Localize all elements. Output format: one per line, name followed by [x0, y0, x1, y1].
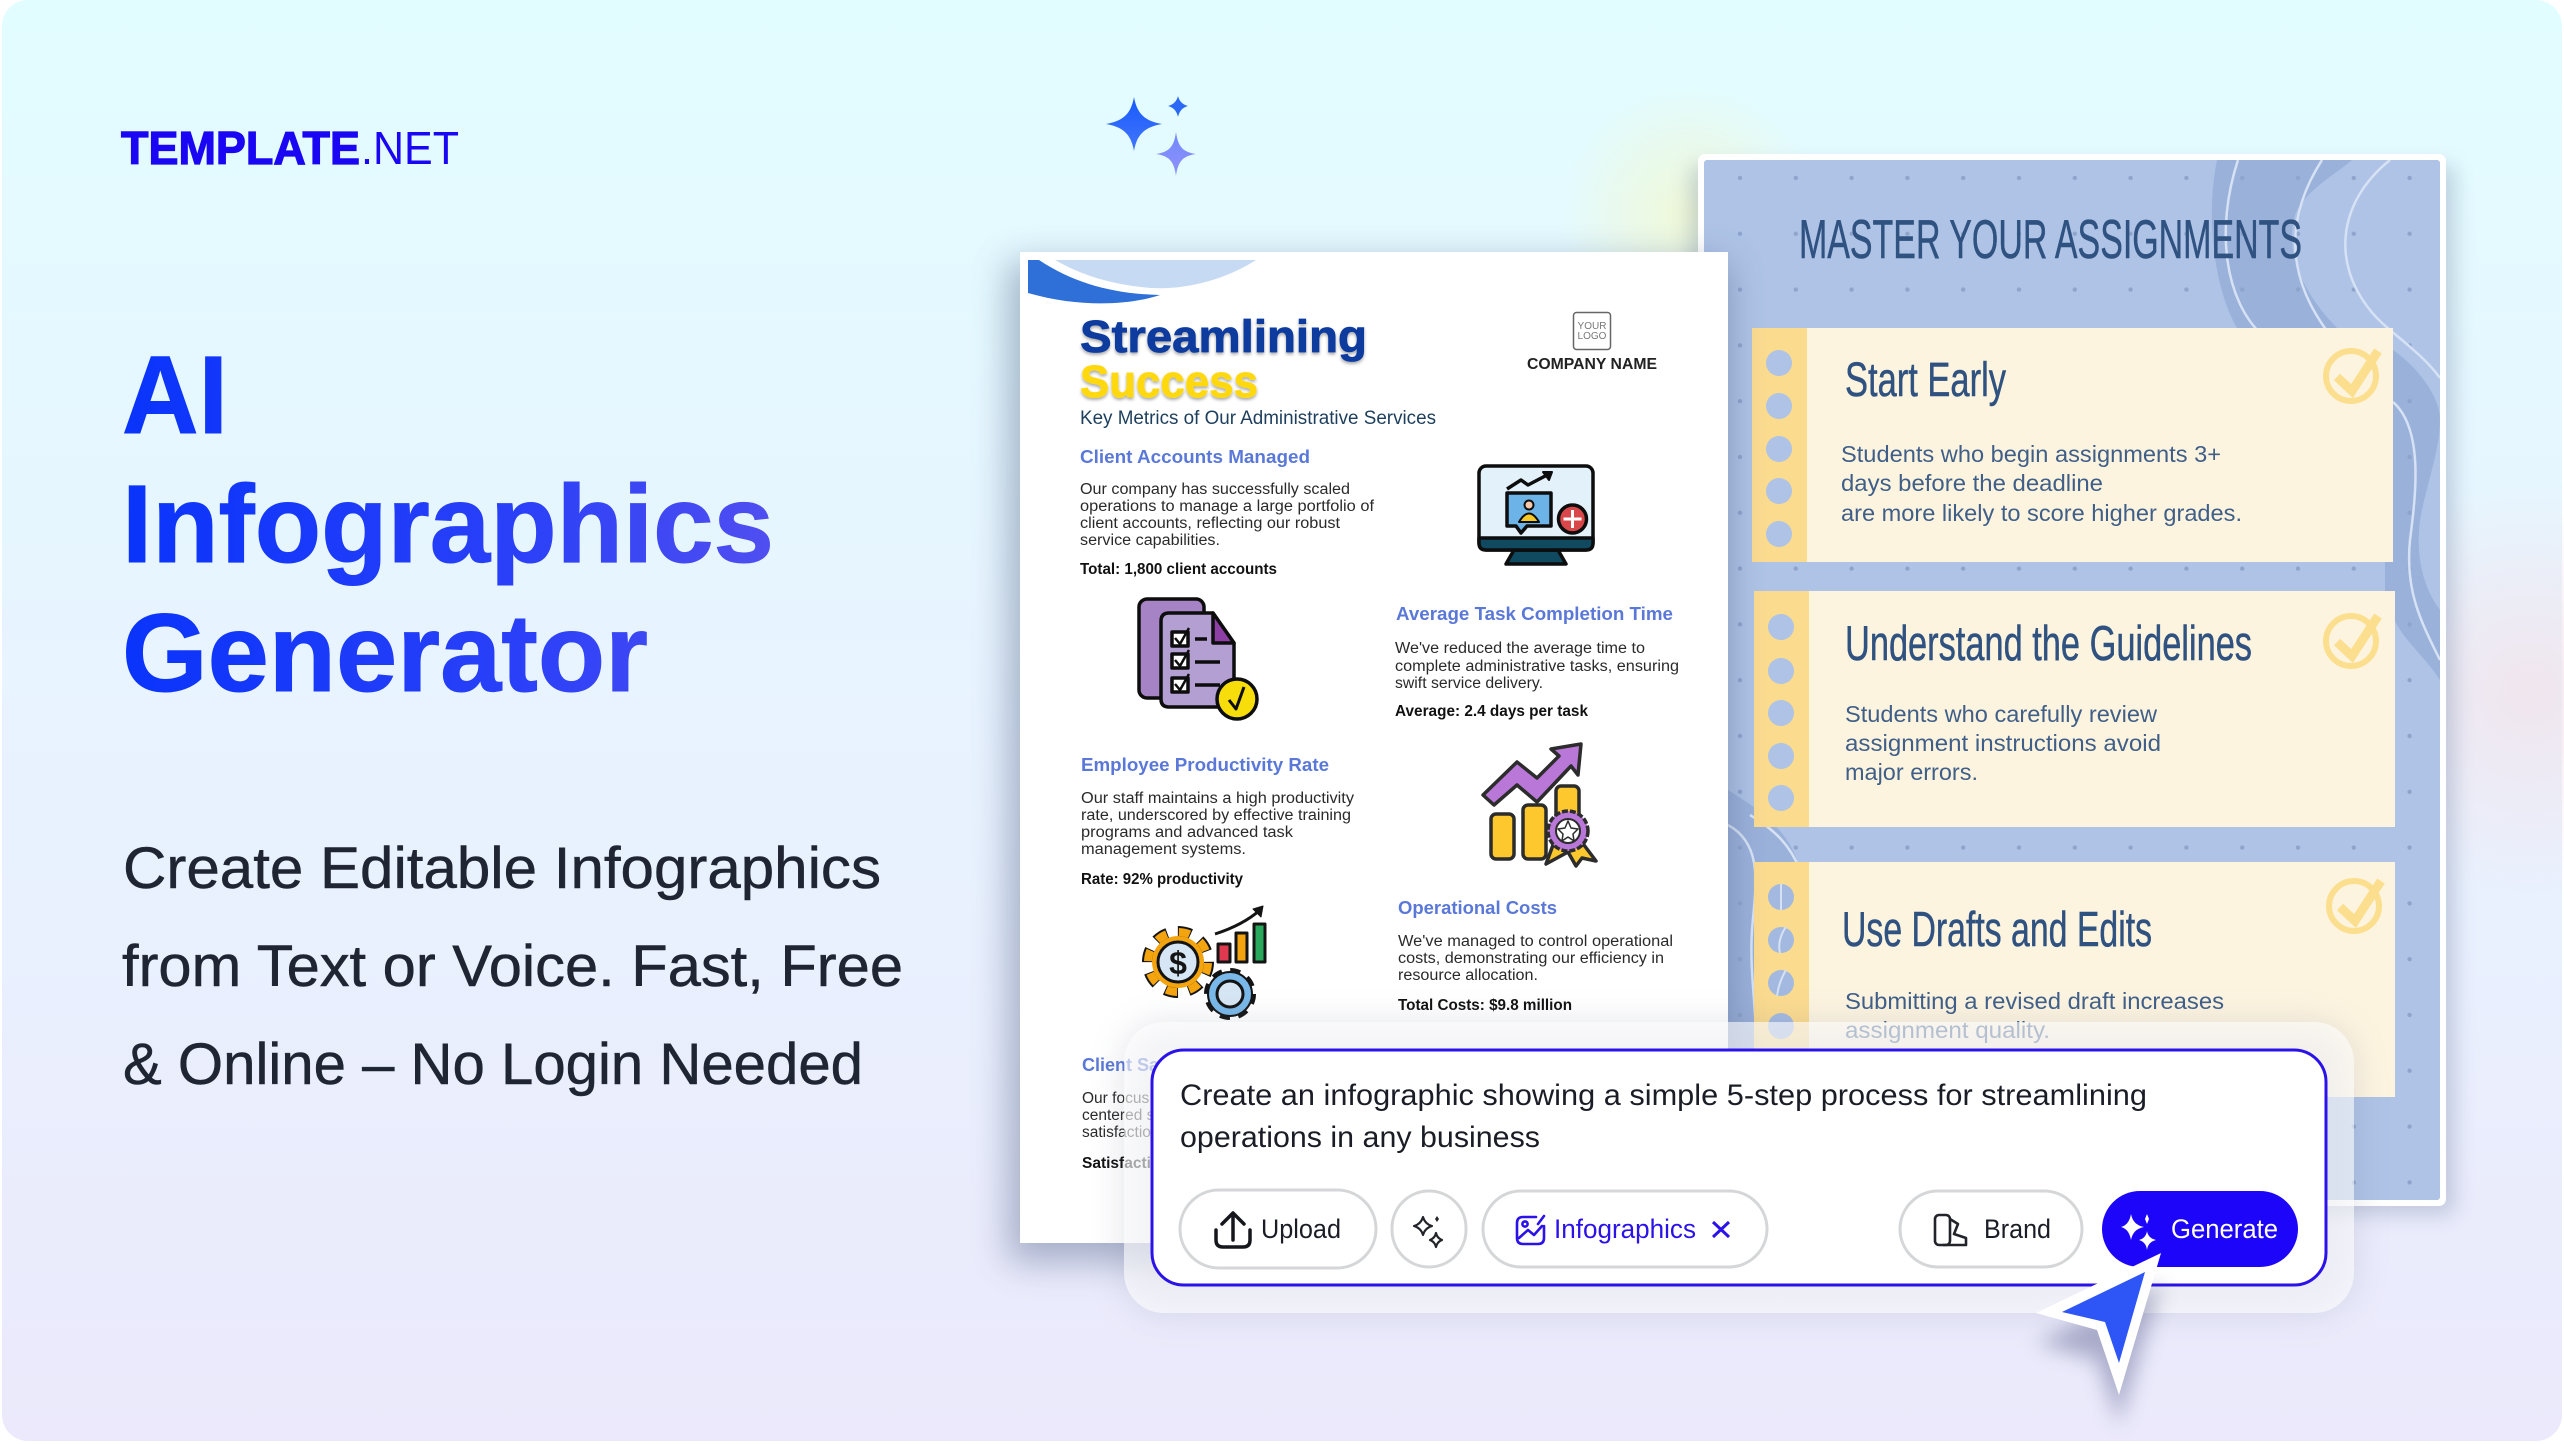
panel: prompt box backdrop	[1124, 1022, 2354, 1313]
icon: cursor arrow	[2036, 1253, 2161, 1425]
button: upload: Upload	[1261, 1214, 1341, 1244]
icon: gears with bars	[1148, 906, 1265, 1016]
card: start early: Start Early	[1845, 354, 2006, 407]
card: understand the guidelines: major errors.	[1845, 759, 1978, 785]
card: understand the guidelines	[1754, 591, 2395, 827]
card: understand the guidelines: assignment instructions avoid	[1845, 730, 2161, 756]
section: client satisfaction (partly hidden): centered s	[1082, 1107, 1155, 1124]
section: employee productivity rate: management systems.	[1081, 841, 1246, 858]
icon: growth chart with badge	[1483, 744, 1596, 866]
section: client satisfaction (partly hidden)	[1082, 1055, 1160, 1172]
section: average task completion time: complete administrative tasks, ensuring	[1395, 658, 1679, 675]
section: employee productivity rate: Rate: 92% productivity	[1081, 871, 1243, 888]
section: average task completion time: Average Task Completion Time	[1396, 604, 1673, 624]
section: average task completion time	[1395, 604, 1679, 720]
section: operational costs: We've managed to control operational	[1398, 933, 1673, 950]
section: average task completion time: swift service delivery.	[1395, 675, 1543, 692]
title: AI Infographics Generator: AI	[122, 334, 228, 457]
card: start early: Students who begin assignments 3+	[1841, 441, 2221, 467]
section: employee productivity rate: rate, underscored by effective training	[1081, 807, 1351, 824]
section: employee productivity rate: Our staff maintains a high productivity	[1081, 790, 1354, 807]
subtitle text: & Online – No Login Needed	[123, 1032, 863, 1097]
card: start early	[1752, 328, 2393, 562]
button: infographics tag: Infographics	[1554, 1214, 1696, 1244]
section: operational costs: Operational Costs	[1398, 898, 1557, 918]
section: employee productivity rate: Employee Productivity Rate	[1081, 755, 1329, 775]
section: employee productivity rate: programs and advanced task	[1081, 824, 1293, 841]
subtitle text	[122, 836, 903, 1097]
section: average task completion time: We've reduced the average time to	[1395, 640, 1645, 657]
button: generate: Generate	[2171, 1214, 2278, 1244]
section: employee productivity rate	[1081, 755, 1354, 888]
icon: checklist documents	[1139, 599, 1257, 719]
section: client satisfaction (partly hidden): Satisfacti	[1082, 1155, 1151, 1172]
button: generate	[2102, 1191, 2298, 1267]
section: operational costs: costs, demonstrating our efficiency in	[1398, 950, 1664, 967]
section: client accounts managed: service capabilities.	[1080, 532, 1220, 549]
decorative header wave	[1028, 260, 1256, 303]
panel: streamlining success document	[1008, 252, 1728, 1262]
section: client accounts managed: Our company has successfully scaled	[1080, 481, 1350, 498]
document subtitle: Key Metrics of Our Administrative Services	[1080, 408, 1436, 429]
company logo: YOUR	[1578, 321, 1606, 332]
button: sparkle	[1392, 1191, 1466, 1267]
panel: master your assignments poster	[1690, 154, 2455, 1215]
icon: sparkles	[1106, 96, 1196, 176]
subtitle text: from Text or Voice. Fast, Free	[122, 934, 903, 999]
document title	[1080, 311, 1367, 407]
section: client satisfaction (partly hidden): satisfactio	[1082, 1124, 1151, 1141]
card: use drafts and edits	[1754, 862, 2395, 1097]
section: client satisfaction (partly hidden): Our focus	[1082, 1090, 1149, 1107]
section: client accounts managed	[1080, 447, 1375, 578]
company logo	[1527, 312, 1657, 373]
section: client accounts managed: operations to manage a large portfolio of	[1080, 498, 1375, 515]
section: operational costs: Total Costs: $9.8 million	[1398, 997, 1572, 1014]
icon: monitor with chart and user	[1479, 466, 1593, 564]
section: client satisfaction (partly hidden): Client Sa	[1082, 1055, 1160, 1075]
button: brand	[1900, 1191, 2082, 1267]
prompt text	[1180, 1079, 2147, 1154]
logo: TEMPLATE.NET: .NET	[361, 122, 459, 174]
card: understand the guidelines: Students who carefully review	[1845, 701, 2157, 727]
subtitle text: Create Editable Infographics	[123, 836, 881, 901]
panel: prompt box	[1152, 1050, 2326, 1285]
section: operational costs: resource allocation.	[1398, 967, 1538, 984]
card: use drafts and edits: assignment quality.	[1845, 1017, 2050, 1043]
company logo: LOGO	[1578, 331, 1607, 342]
section: operational costs	[1398, 898, 1673, 1014]
section: client accounts managed: Client Accounts Managed	[1080, 447, 1310, 467]
card: understand the guidelines: Understand the Guidelines	[1845, 617, 2252, 671]
title: AI Infographics Generator	[122, 334, 774, 715]
card: start early: are more likely to score higher grades.	[1841, 500, 2242, 526]
button: upload	[1180, 1190, 1376, 1268]
document title: Streamlining	[1080, 311, 1367, 362]
icon: gears with bars: $	[1169, 945, 1187, 981]
title: AI Infographics Generator: Infographics	[122, 463, 774, 586]
card: use drafts and edits: Use Drafts and Edits	[1842, 903, 2152, 957]
company logo: COMPANY NAME	[1527, 356, 1657, 373]
button: infographics tag	[1483, 1191, 1767, 1267]
card: start early: days before the deadline	[1841, 470, 2103, 496]
document title: Success	[1080, 356, 1258, 407]
section: client accounts managed: Total: 1,800 client accounts	[1080, 561, 1277, 578]
section: client accounts managed: client accounts, reflecting our robust	[1080, 515, 1341, 532]
logo: TEMPLATE.NET: TEMPLATE	[121, 122, 360, 174]
prompt text: Create an infographic showing a simple 5-step process for streamlining	[1180, 1079, 2147, 1112]
section: average task completion time: Average: 2.4 days per task	[1395, 703, 1588, 720]
button: brand: Brand	[1984, 1214, 2051, 1244]
prompt text: operations in any business	[1180, 1121, 1540, 1154]
card: use drafts and edits: Submitting a revised draft increases	[1845, 988, 2224, 1014]
title: AI Infographics Generator: Generator	[122, 592, 648, 715]
